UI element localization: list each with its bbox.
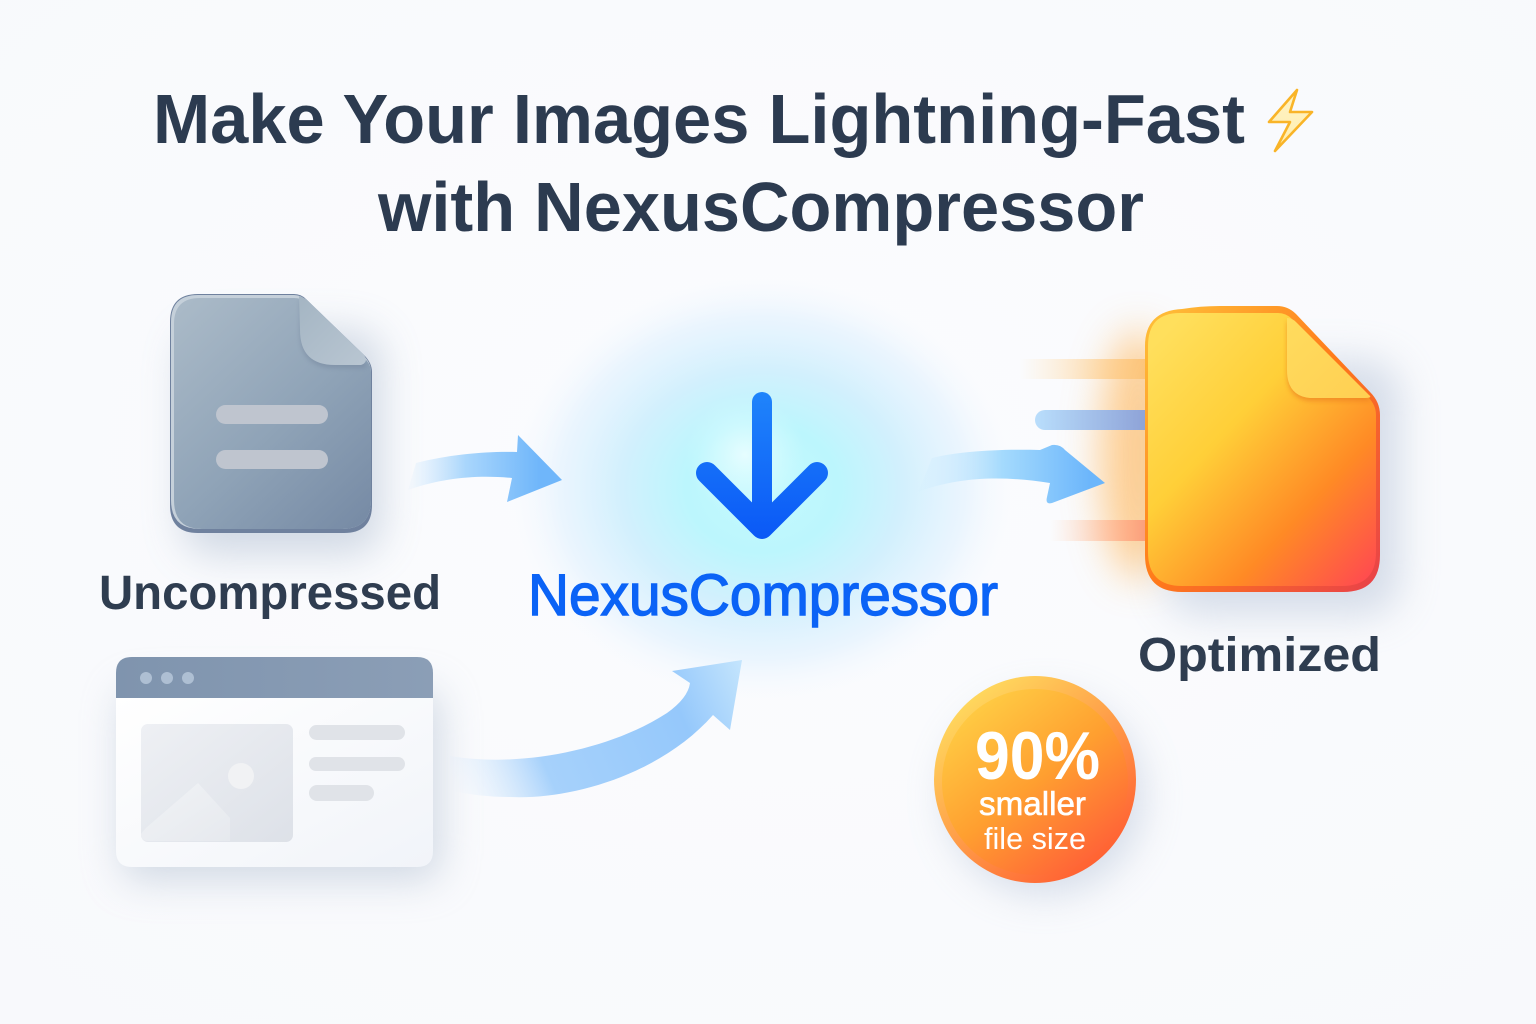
badge text: 90% [975, 718, 1100, 794]
title [153, 80, 1245, 246]
icon: orange file body [1145, 306, 1380, 592]
panel: optimized document [1145, 306, 1400, 615]
icon: lightning bolt [1269, 90, 1312, 151]
document text lines [216, 405, 328, 469]
panel: uncompressed document [170, 294, 382, 555]
arrow: compressor to optimized [918, 445, 1105, 503]
window dots [140, 672, 194, 684]
badge text: file size [984, 821, 1086, 856]
panel: browser window [116, 657, 440, 880]
badge: 90% smaller file size [934, 676, 1143, 894]
title: Make Your Images Lightning-Fast [153, 80, 1245, 158]
label: NexusCompressor: NexusCompressor [528, 563, 998, 628]
arrow: browser to compressor [450, 660, 742, 797]
arrow: document to compressor [408, 435, 562, 502]
badge text [975, 718, 1100, 856]
central blue glow [507, 273, 1017, 703]
window body [116, 698, 433, 867]
icon: down arrow [707, 402, 817, 528]
title: with NexusCompressor [377, 168, 1144, 246]
text placeholder lines [309, 725, 405, 801]
badge text: smaller [979, 785, 1086, 822]
label: Optimized: Optimized [1138, 629, 1381, 682]
label: Uncompressed: Uncompressed [99, 567, 441, 620]
icon: file fold [1287, 318, 1372, 401]
image placeholder [141, 724, 293, 842]
icon: file fold [299, 296, 367, 368]
speed lines [1020, 330, 1176, 580]
window header bar [116, 657, 433, 698]
icon: gray file body [170, 294, 372, 533]
